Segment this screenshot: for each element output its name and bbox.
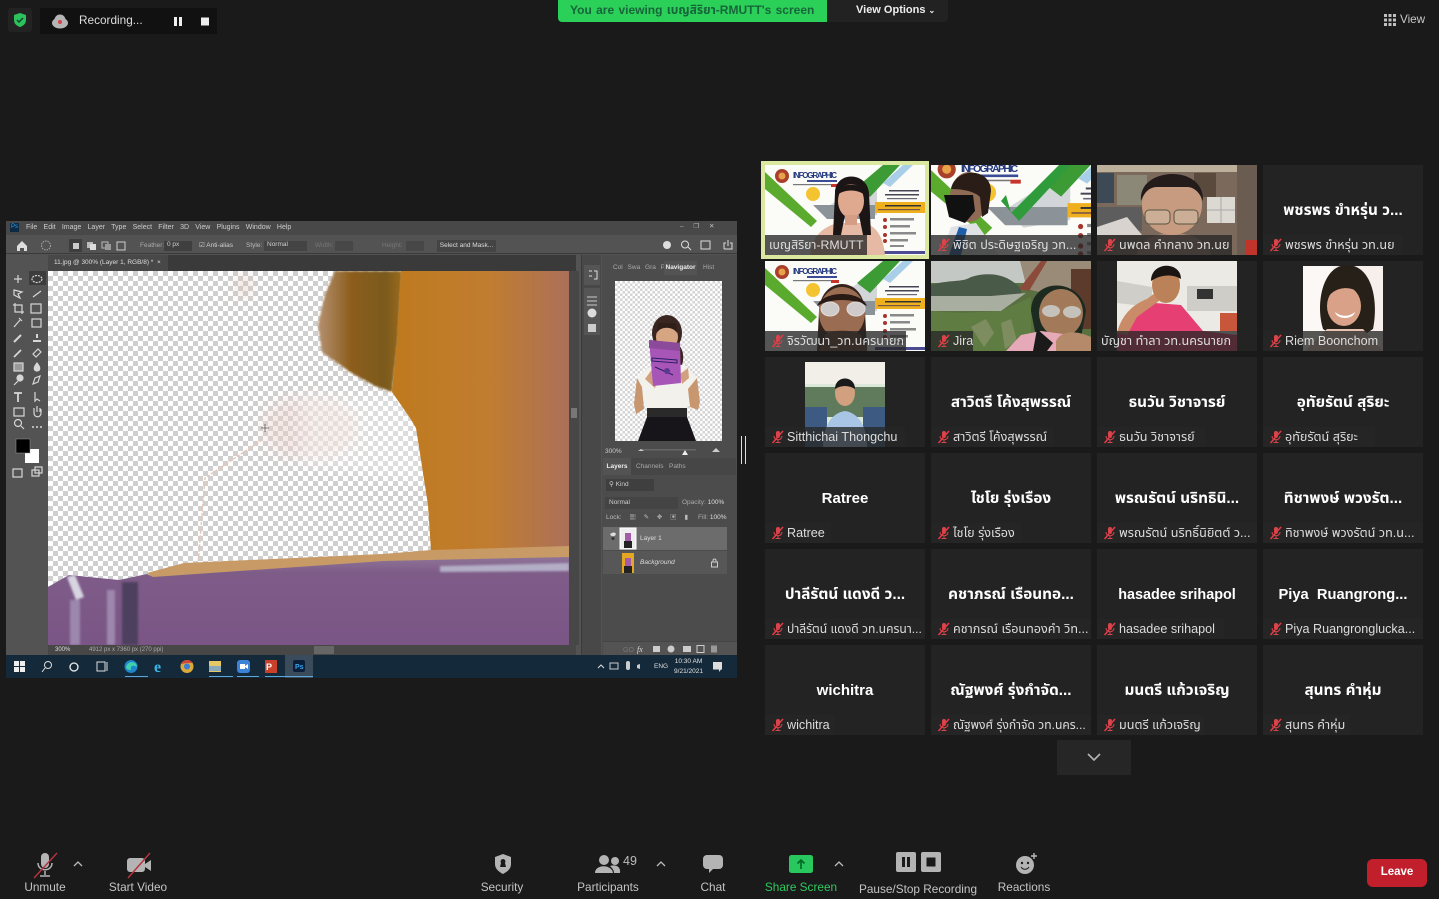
tile: อุทัยรัตน์ <box>1263 357 1423 447</box>
canvas scrollbar <box>569 271 579 645</box>
windows taskbar <box>6 655 737 678</box>
layer row: Layer 1: Layer 1 <box>640 535 662 542</box>
name label: พิชิต ประดิษฐเจริญ วท... <box>953 238 1076 252</box>
name label <box>1263 427 1375 447</box>
icon: video off <box>127 852 151 878</box>
dashed residue <box>198 440 262 565</box>
tile: Jira <box>931 261 1091 351</box>
display name: ปาลีรัตน์ แดงดี ว... <box>785 586 905 603</box>
name label: สาวิตรี โค้งสุพรรณ์ <box>953 430 1047 444</box>
screen share banner <box>558 0 827 22</box>
toolbar: reactions <box>998 853 1050 894</box>
name label <box>1263 619 1423 639</box>
toolbar: pause/stop recording <box>859 852 977 896</box>
icon: shield <box>495 854 511 874</box>
name label: อุทัยรัตน์ สุริยะ <box>1285 430 1358 444</box>
name label: Piya Ruangronglucka... <box>1285 622 1415 636</box>
name label <box>1097 331 1238 351</box>
shared screen: Photoshop window: Fill: 100% <box>698 514 727 521</box>
screen share banner: You are viewing เบญสิริยา-RMUTT's screen <box>570 3 814 17</box>
clock <box>674 658 703 675</box>
name label: บัญชา ทำลา วท.นครนายก <box>1101 334 1231 348</box>
layers panel tabs: Channels <box>636 463 663 470</box>
display name: อุทัยรัตน์ สุริยะ <box>1297 394 1389 411</box>
navigator preview <box>615 281 722 441</box>
speaker name label <box>765 235 867 255</box>
display name: พชรพร ขำหรุ่น ว... <box>1283 202 1403 219</box>
options bar: ☑ Anti-alias <box>199 242 233 249</box>
leave button: Leave <box>1381 866 1413 878</box>
name label <box>765 715 835 735</box>
display name: ไชโย รุ่งเรือง <box>971 490 1051 507</box>
name label <box>931 235 1091 255</box>
tile: Riem Boonchom <box>1263 261 1423 351</box>
layers panel footer icons <box>603 641 737 655</box>
tools panel <box>12 271 46 478</box>
options bar: Width: <box>315 242 333 249</box>
display name: มนตรี แก้วเจริญ <box>1124 682 1230 699</box>
canvas status bar: 4912 px x 7360 px (270 ppi) <box>89 647 163 653</box>
tile: พรณรัตน์ <box>1097 453 1257 543</box>
toolbar: start video <box>109 852 167 894</box>
layer row: Layer 1 <box>603 527 727 550</box>
speaker name label: เบญสิริยา-RMUTT <box>769 238 864 252</box>
name label: ทิชาพงษ์ พวงรัตน์ วท.น... <box>1285 526 1414 540</box>
tile: Sitthichai Thongchu <box>765 357 925 447</box>
hair <box>318 271 402 392</box>
participant video <box>931 165 1091 255</box>
view layout button: View <box>1400 13 1425 26</box>
label: Share Screen: Share Screen <box>765 880 837 894</box>
name label <box>931 523 1021 543</box>
menu bar: Ps <box>11 224 18 230</box>
display name: สุนทร คำหุ่ม <box>1304 682 1382 699</box>
options bar: 0 px <box>167 241 179 248</box>
tile: hasadee srihapol <box>1097 549 1257 639</box>
toolbar: security <box>481 854 524 894</box>
icon: recording cloud <box>52 14 68 28</box>
recording text: Recording... <box>79 13 143 27</box>
name label: Sitthichai Thongchu <box>787 430 897 444</box>
taskbar app icons: e <box>154 659 161 676</box>
display name: hasadee srihapol <box>1118 587 1236 603</box>
tile: พิชิต <box>931 165 1091 255</box>
toolbar: participants <box>577 854 666 894</box>
lock and fill row: Lock: ▦ ✎ ✥ ▣ ▮ <box>606 514 688 521</box>
name label <box>931 715 1091 735</box>
name label: ธนวัน วิชาจารย์ <box>1119 430 1195 444</box>
shared screen: Photoshop window <box>6 221 737 678</box>
name label <box>1097 619 1224 639</box>
icon: speech bubble <box>703 855 723 873</box>
name label: สุนทร คำหุ่ม <box>1285 718 1345 732</box>
tile: wichitra <box>765 645 925 735</box>
tile: เบญสิริยา-RMUTT (active speaker) <box>761 161 929 259</box>
canvas status bar <box>48 645 576 655</box>
display name: ทิชาพงษ์ พวงรัต... <box>1284 490 1402 507</box>
menu bar: – ❐ ✕ <box>680 223 715 230</box>
notification icon <box>713 662 722 672</box>
tile: ปาลีรัตน์ <box>765 549 925 639</box>
leave button <box>1367 859 1427 887</box>
tile: ณัฐพงศ์ <box>931 645 1091 735</box>
view options button: View Options ⌄ <box>856 4 935 16</box>
tile: ทิชาพงษ์ <box>1263 453 1423 543</box>
shared screen: Photoshop window: Hist <box>703 264 714 271</box>
menu bar: File Edit Image Layer Type Select Filter 3D View Plugins Window Help <box>26 224 291 231</box>
tile: พชรพร <box>1263 165 1423 255</box>
participant video <box>765 261 925 351</box>
display name: Piya Ruangrong... <box>1279 587 1407 603</box>
name label: wichitra <box>787 718 830 732</box>
tile: สุนทร <box>1263 645 1423 735</box>
shirt haze <box>238 275 425 485</box>
name label <box>1263 715 1350 735</box>
layers panel footer icons: fx <box>637 645 643 654</box>
participant count: 49 <box>623 854 637 868</box>
name label: คชาภรณ์ เรือนทองคำ วิท... <box>953 622 1089 636</box>
navigator zoom slider <box>638 448 720 455</box>
blend mode and opacity row <box>605 497 678 509</box>
name label: Ratree <box>787 526 825 540</box>
name label: นพดล คำกลาง วท.นย <box>1119 238 1229 252</box>
options bar <box>6 236 737 254</box>
security shield button <box>8 8 32 32</box>
document tab: 11.jpg @ 300% (Layer 1, RGB/8) * × <box>54 259 161 266</box>
layer filter row: ⚲ Kind <box>609 481 629 488</box>
tile: ไชโย <box>931 453 1091 543</box>
tile: จิรวัฒนา <box>765 261 925 351</box>
book cover <box>48 557 569 645</box>
layers panel tabs: Layers <box>607 463 627 470</box>
icon: people with count <box>595 855 666 873</box>
name label: จิรวัฒนา_วท.นครนายก <box>787 334 904 348</box>
name label <box>1263 523 1423 543</box>
label: Security: Security <box>481 880 523 894</box>
view options button <box>827 0 948 22</box>
name label: Jira <box>953 334 973 348</box>
icon: pause and stop <box>174 17 209 26</box>
layers panel tabs: Paths <box>669 463 686 470</box>
display name: คชาภรณ์ เรือนทอ... <box>948 586 1074 603</box>
book edge <box>147 546 569 578</box>
display name: สาวิตรี โค้งสุพรรณ์ <box>951 394 1071 411</box>
tile: Ratree <box>765 453 925 543</box>
panels column <box>602 255 737 866</box>
shared screen: Photoshop window: Opacity: 100% <box>682 499 724 506</box>
name label: มนตรี แก้วเจริญ <box>1119 718 1201 732</box>
tile: นพดล <box>1097 165 1257 255</box>
icon: pause and stop buttons <box>896 852 941 872</box>
canvas status bar: 300% <box>55 647 70 653</box>
toolbar: chat <box>701 855 726 894</box>
options bar: Style: <box>246 242 262 249</box>
name label <box>1097 523 1257 543</box>
icon: green share arrow <box>789 855 844 873</box>
tile: บัญชา <box>1097 261 1257 351</box>
taskbar app icons: P <box>266 662 272 672</box>
tile: คชาภรณ์ <box>931 549 1091 639</box>
label: Chat: Chat <box>701 880 725 894</box>
clock: 10:30 AM <box>675 658 702 665</box>
name label: ณัฐพงศ์ รุ่งกำจัด วท.นคร... <box>953 718 1086 732</box>
name label <box>1097 235 1232 255</box>
name label <box>765 427 905 447</box>
participant video <box>931 261 1091 351</box>
panel resize handle <box>741 436 746 464</box>
options bar: Height: <box>382 242 403 249</box>
options bar: Normal <box>267 241 288 248</box>
girl figure <box>634 315 700 441</box>
clock: 9/21/2021 <box>674 668 703 675</box>
layers panel footer icons: GO <box>623 647 634 654</box>
name label <box>1263 235 1403 255</box>
name label <box>931 427 1053 447</box>
name label <box>931 619 1091 639</box>
blend mode and opacity row: Normal <box>609 499 630 506</box>
layer filter row <box>606 479 654 491</box>
label: Pause/Stop Recording: Pause/Stop Recording <box>859 882 977 896</box>
icon: smiley with plus <box>1016 853 1037 874</box>
label: Reactions: Reactions <box>998 880 1050 894</box>
display name: wichitra <box>817 682 873 699</box>
name label <box>1097 427 1205 447</box>
active speaker video <box>765 165 925 255</box>
name label <box>765 523 831 543</box>
display name: ธนวัน วิชาจารย์ <box>1129 394 1225 411</box>
taskbar app icons <box>14 659 313 677</box>
display name: ณัฐพงศ์ รุ่งกำจัด... <box>950 682 1072 699</box>
tile: มนตรี <box>1097 645 1257 735</box>
participant video <box>805 362 885 447</box>
participant video <box>1117 261 1237 351</box>
navigator tabs: Col Swa Gra Pat <box>613 264 670 271</box>
document tab <box>48 255 168 271</box>
layer row: Background <box>603 551 727 574</box>
icon: muted microphone <box>34 852 82 878</box>
name label: hasadee srihapol <box>1119 622 1215 636</box>
system tray <box>598 661 640 670</box>
display name: Ratree <box>822 490 868 507</box>
label: Participants: Participants <box>577 880 639 894</box>
name label: พชรพร ขำหรุ่น วท.นย <box>1285 238 1395 252</box>
label: Start Video: Start Video <box>109 880 167 894</box>
recording status bar <box>40 8 217 34</box>
name label: ไชโย รุ่งเรือง <box>953 526 1015 540</box>
name label <box>765 331 906 351</box>
name label: Riem Boonchom <box>1285 334 1378 348</box>
brush cursor <box>261 424 269 432</box>
layers panel tabs <box>603 458 736 475</box>
language indicator: ENG <box>654 663 668 670</box>
name label <box>931 331 973 351</box>
options bar: Select and Mask... <box>440 242 493 249</box>
tile: ธนวัน <box>1097 357 1257 447</box>
name label <box>1263 331 1383 351</box>
toolbar: share screen <box>765 855 844 894</box>
participant video <box>1097 165 1257 255</box>
layer row: Background: Background <box>640 559 675 566</box>
book highlights and spine <box>67 563 569 645</box>
name label <box>1097 715 1204 735</box>
options bar: Feather: <box>140 242 164 249</box>
navigator zoom percent: 300% <box>605 448 622 455</box>
name label: ปาลีรัตน์ แดงดี วท.นครนา... <box>787 622 922 636</box>
menu bar <box>6 221 737 235</box>
participant video <box>1303 265 1383 351</box>
label: Unmute: Unmute <box>24 880 66 894</box>
display name: พรณรัตน์ นริทธินิ... <box>1115 490 1239 507</box>
tile: Piya Ruangrong <box>1263 549 1423 639</box>
toolbar: unmute <box>24 852 82 894</box>
taskbar app icons: Ps <box>295 664 304 671</box>
skin <box>392 271 569 551</box>
active Photoshop task highlight <box>285 655 313 678</box>
name label <box>765 619 925 639</box>
name label: พรณรัตน์ นริทธิ์นิยิตต์ ว... <box>1119 526 1251 540</box>
tile: สาวิตรี <box>931 357 1091 447</box>
collapsed dock icons <box>581 255 601 866</box>
view layout button <box>1384 13 1426 26</box>
canvas: transparent cut-out zoomed view <box>48 271 569 645</box>
shared screen: Photoshop window: Navigator <box>666 264 695 271</box>
next page chevron button <box>1057 740 1131 775</box>
